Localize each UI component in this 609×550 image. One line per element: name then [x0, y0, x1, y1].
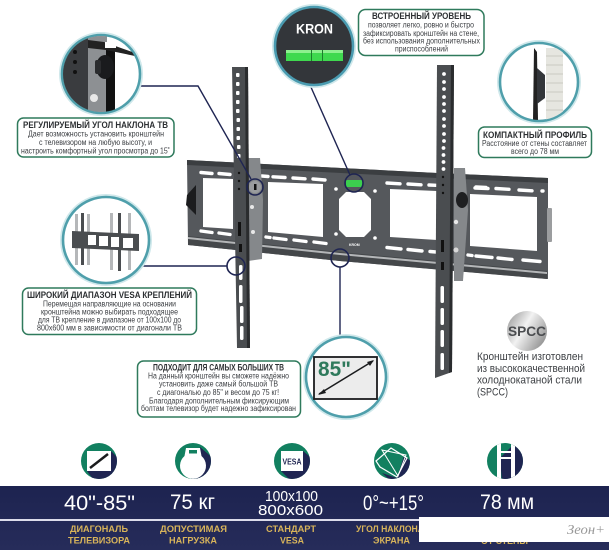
callout: largest TVs: болтам телевизор будет надежно зафиксирован [141, 404, 296, 413]
plate slots [201, 172, 543, 262]
brand mark on plate: KROM [349, 243, 360, 247]
SPCC description: (SPCC) [477, 386, 508, 398]
left knob [186, 185, 196, 215]
icon: VESA: VESA [282, 456, 302, 466]
plate windows [203, 178, 537, 251]
callout: built-in level: зафиксировать кронштейн на стене, [363, 29, 479, 38]
leader: size callout [339, 267, 341, 338]
circle: spirit level photo [273, 5, 355, 87]
callout: largest TVs [138, 361, 300, 417]
circle: compact profile photo [498, 41, 580, 123]
callout: compact profile: КОМПАКТНЫЙ ПРОФИЛЬ [483, 129, 588, 140]
spec labels: ЭКРАНА [373, 536, 411, 546]
callout: largest TVs: На данный кронштейн вы сможете надёжно [148, 372, 290, 380]
left side bracket [248, 158, 263, 261]
callout: VESA range: кронштейна можно выбирать подходящее [41, 308, 178, 316]
right edge tab [547, 208, 552, 242]
left rail [232, 67, 250, 348]
spec labels: ДОПУСТИМАЯ [160, 524, 227, 534]
callout: VESA range [22, 288, 196, 334]
SPCC description: из высококачественной [477, 363, 585, 375]
spec values: 75 кг [170, 491, 215, 514]
callout: VESA range: 800х600 мм в зависимости от диагонали ТВ [37, 324, 182, 332]
right rail [435, 65, 454, 378]
level vial on plate [346, 180, 363, 187]
spec labels [68, 524, 528, 546]
circle: spirit level photo: KRON [296, 22, 333, 36]
watermark: Зеон+ [567, 523, 605, 538]
spec labels: VESA [280, 536, 304, 546]
icon: VESA [274, 443, 310, 479]
leader: VESA callout [142, 265, 227, 267]
SPCC badge: SPCC [508, 323, 546, 339]
spec labels: СТАНДАРТ [266, 524, 317, 534]
spec values: 0°~+15° [363, 492, 424, 515]
wall mount bracket [186, 65, 552, 378]
callout: compact profile: Расстояние от стены составляет [482, 139, 587, 148]
spec values: 800x600 [258, 502, 323, 519]
callout: VESA range: ШИРОКИЙ ДИАПАЗОН VESA КРЕПЛЕНИЙ [27, 289, 192, 300]
SPCC badge [507, 311, 547, 351]
spec labels: ОТ СТЕНЫ [481, 536, 528, 546]
callout: largest TVs: с диагональю до 85" и весом до 75 кг! [157, 388, 279, 397]
leader: level callout [310, 85, 350, 175]
spec values: 40"-85" [64, 492, 135, 515]
spec labels: ДИАГОНАЛЬ [70, 524, 129, 534]
lock detail on plate [249, 181, 261, 193]
callout: tilt angle: Дает возможность установить кронштейн [28, 130, 164, 138]
spec values [64, 488, 534, 519]
watermark [419, 517, 609, 542]
spec values: 78 мм [480, 491, 534, 514]
right side bracket [454, 168, 468, 281]
marker: level [345, 174, 363, 192]
callout: tilt angle: настроить комфортный угол просмотра до 15˚ [21, 146, 170, 156]
marker: tilt [247, 179, 263, 195]
callout: compact profile [478, 127, 592, 158]
marker: VESA [227, 257, 245, 275]
callout: built-in level: приспособлений [395, 44, 448, 54]
callout: built-in level: ВСТРОЕННЫЙ УРОВЕНЬ [372, 10, 472, 21]
callout: built-in level [358, 10, 484, 56]
plate holes [334, 187, 377, 240]
SPCC description: Кронштейн изготовлен [477, 351, 583, 363]
SPCC description [477, 351, 585, 398]
circle: 85 inch screen: 85" [318, 358, 351, 381]
spec labels: НАГРУЗКА [169, 536, 218, 546]
spec values: 100x100 [265, 488, 318, 505]
callout: VESA range: Перемещая направляющие на основании [43, 300, 176, 308]
spec labels: ТЕЛЕВИЗОРА [68, 536, 130, 546]
callout: built-in level: без использования дополнительных [363, 36, 480, 46]
circle: VESA range photo [61, 195, 151, 285]
icon: screen diagonal [81, 443, 117, 479]
icon: tilt angle [374, 443, 410, 479]
callout: built-in level: позволяет легко, ровно и быстро [368, 20, 475, 30]
callout: tilt angle: с телевизором на любую высоту, и [39, 138, 152, 147]
icon: wall distance [487, 443, 523, 479]
circle: 85 inch screen [304, 335, 388, 419]
callout: compact profile: всего до 78 мм [511, 147, 559, 156]
spec labels: УГОЛ НАКЛОНА [356, 524, 424, 534]
circle: tilt knob photo [60, 33, 142, 115]
callout: VESA range: для ТВ крепление в диапазоне от 100х100 до [38, 316, 182, 324]
marker: size [331, 249, 349, 267]
callout: tilt angle [18, 118, 174, 157]
callout: largest TVs: ПОДХОДИТ ДЛЯ САМЫХ БОЛЬШИХ ТВ [153, 362, 284, 372]
SPCC description: холоднокатаной стали [477, 374, 582, 386]
icon: weight [175, 443, 211, 479]
callout: largest TVs: установить даже самый большой ТВ [159, 380, 278, 388]
callout: tilt angle: РЕГУЛИРУЕМЫЙ УГОЛ НАКЛОНА ТВ [23, 119, 168, 130]
main plate [187, 160, 548, 279]
specification band [0, 486, 609, 550]
leader: tilt callout [141, 86, 251, 179]
callout: largest TVs: Благодаря дополнительным фиксирующим [149, 396, 289, 406]
